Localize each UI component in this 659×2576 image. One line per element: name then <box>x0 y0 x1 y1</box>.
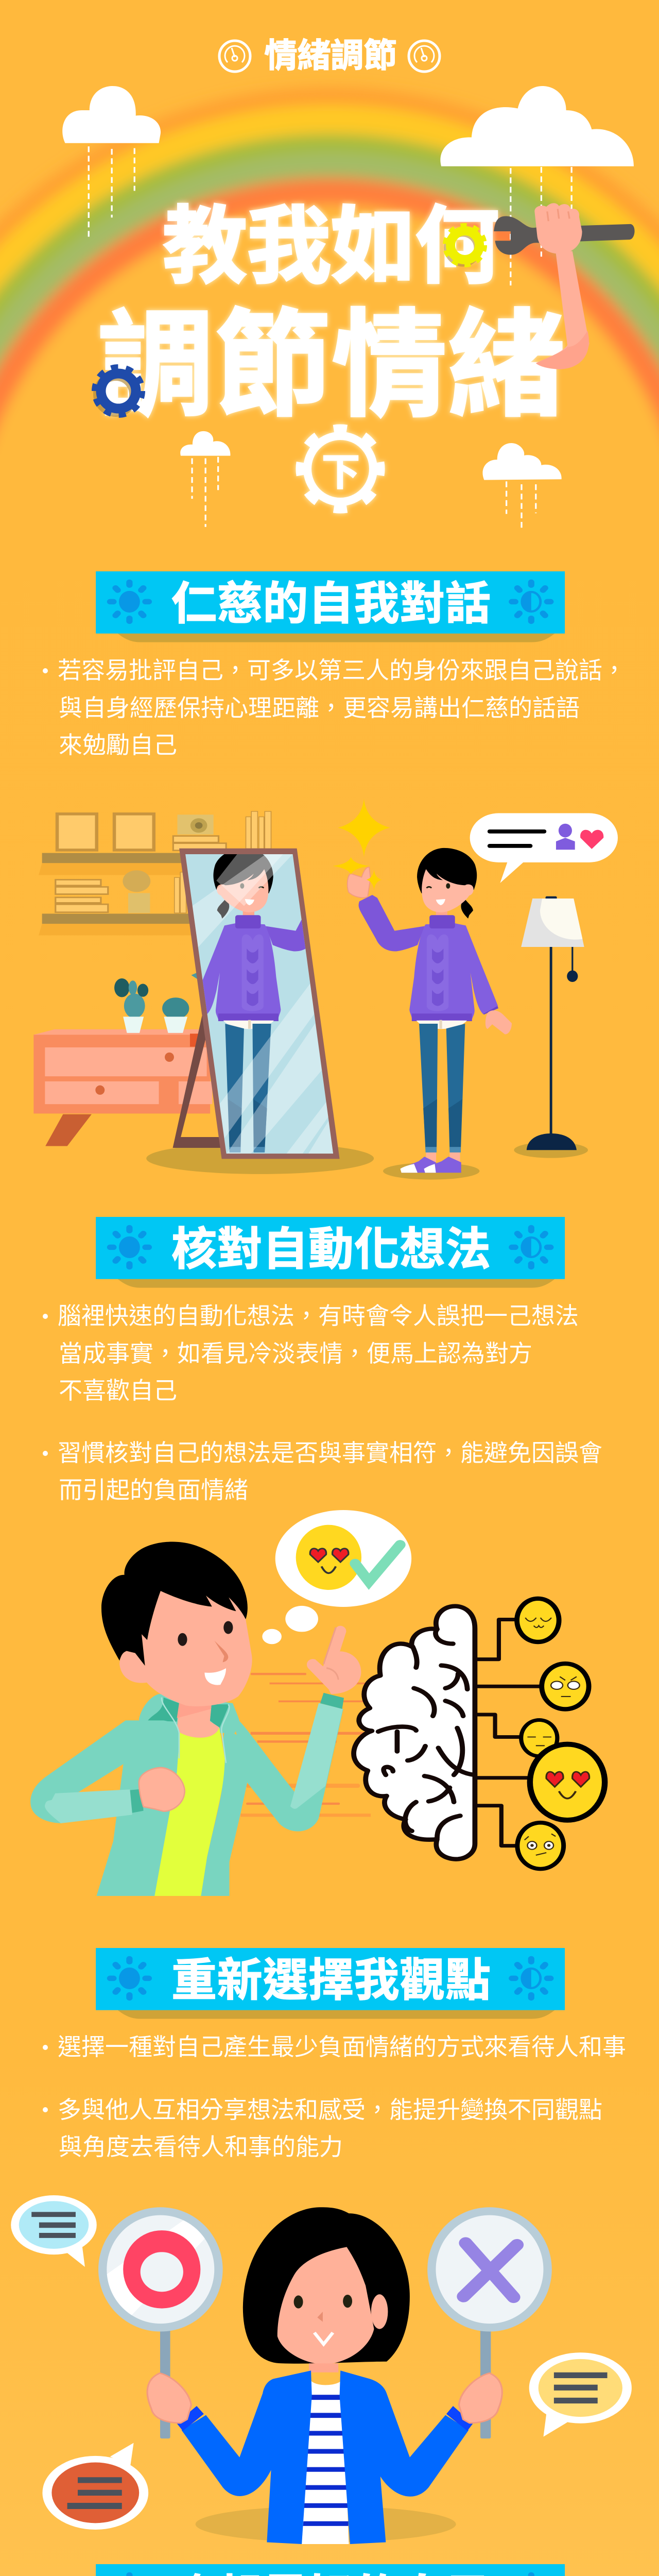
cabinet <box>33 1029 212 1146</box>
speech bubble <box>470 813 618 883</box>
wrench and arm <box>494 203 635 369</box>
shadow <box>196 2506 456 2542</box>
text block: section 2: 當成事實，如看見冷淡表情，便馬上認為對方 <box>59 1340 532 1367</box>
clouds and rain <box>62 86 634 529</box>
hand left <box>147 2373 191 2423</box>
man in hoodie <box>30 1541 371 1896</box>
text block: section 3: 與角度去看待人和事的能力 <box>59 2133 343 2160</box>
heading: 喚起最好的自己 <box>96 2564 565 2576</box>
speech bubble: blue <box>11 2195 97 2267</box>
mirror with reflection <box>146 848 374 1174</box>
shelves <box>39 811 271 936</box>
title: 教我如何 <box>163 199 499 294</box>
text block: section 2: 而引起的負面情緒 <box>59 1477 248 1503</box>
fist <box>139 1768 185 1811</box>
text block: section 2 <box>43 1302 602 1503</box>
illustration: woman with signs <box>11 2195 632 2544</box>
sign: X <box>427 2207 552 2438</box>
hair <box>101 1541 248 1666</box>
label: 情緒調節: 情緒調節 <box>264 37 397 74</box>
woman <box>147 2207 502 2544</box>
heading: 核對自動化想法 <box>96 1217 565 1287</box>
title: 下 <box>322 451 360 494</box>
connectors <box>475 1620 542 1846</box>
speech bubble: yellow <box>529 2352 632 2437</box>
icon: dial right <box>409 41 440 72</box>
sign: O <box>98 2207 223 2438</box>
text block: section 1: 來勉勵自己 <box>59 732 177 758</box>
text block: section 3 <box>43 2033 626 2160</box>
face <box>119 1591 252 1706</box>
icon: white gear <box>300 428 381 510</box>
header panel <box>62 37 634 529</box>
title: 調節情緒 <box>98 300 564 431</box>
emoji: worried <box>517 1823 564 1869</box>
heading: 核對自動化想法: 核對自動化想法 <box>171 1224 491 1275</box>
icon: dial left <box>219 41 250 72</box>
brain <box>354 1606 475 1859</box>
heading: 仁慈的自我對話 <box>96 571 565 642</box>
heading: 重新選擇我觀點 <box>96 1948 565 2019</box>
heading: 重新選擇我觀點: 重新選擇我觀點 <box>171 1955 491 2006</box>
woman with thumbs up <box>348 848 512 1180</box>
illustration: room foreground <box>333 799 618 1158</box>
emoji: calm <box>517 1599 559 1642</box>
text block: section 2: 不喜歡自己 <box>59 1377 177 1404</box>
emoji: annoyed <box>542 1664 589 1709</box>
emoji: neutral <box>521 1720 557 1756</box>
text block: section 1: 若容易批評自己，可多以第三人的身份來跟自己說話， <box>58 657 626 684</box>
illustration: thought and brain <box>262 1510 605 1869</box>
cacti <box>114 972 200 1033</box>
text block: section 2: 習慣核對自己的想法是否與事實相符，能避免因誤會 <box>58 1439 602 1466</box>
floor lamp <box>514 896 588 1158</box>
text block: section 2: 腦裡快速的自動化想法，有時會令人誤把一己想法 <box>58 1302 579 1329</box>
text block: section 3: 多與他人互相分享想法和感受，能提升變換不同觀點 <box>58 2096 602 2123</box>
hand right <box>459 2373 502 2423</box>
heading: 仁慈的自我對話: 仁慈的自我對話 <box>171 578 491 629</box>
text block: section 3: 選擇一種對自己產生最少負面情緒的方式來看待人和事 <box>58 2033 626 2060</box>
emoji: heart eyes <box>530 1744 605 1820</box>
rainbow <box>0 84 659 439</box>
text block: section 1 <box>43 657 626 758</box>
motion lines <box>240 1673 371 1817</box>
icon: blue gear <box>94 367 143 415</box>
thought bubble <box>262 1510 411 1644</box>
text block: section 1: 與自身經歷保持心理距離，更容易講出仁慈的話語 <box>59 694 580 721</box>
illustration: room background <box>33 811 271 1146</box>
icon: yellow gear <box>445 225 485 265</box>
speech bubble: red <box>42 2443 148 2530</box>
title <box>98 199 564 494</box>
pointing hand <box>307 1626 361 1694</box>
sparkles <box>333 799 390 890</box>
shoes <box>400 1157 461 1173</box>
